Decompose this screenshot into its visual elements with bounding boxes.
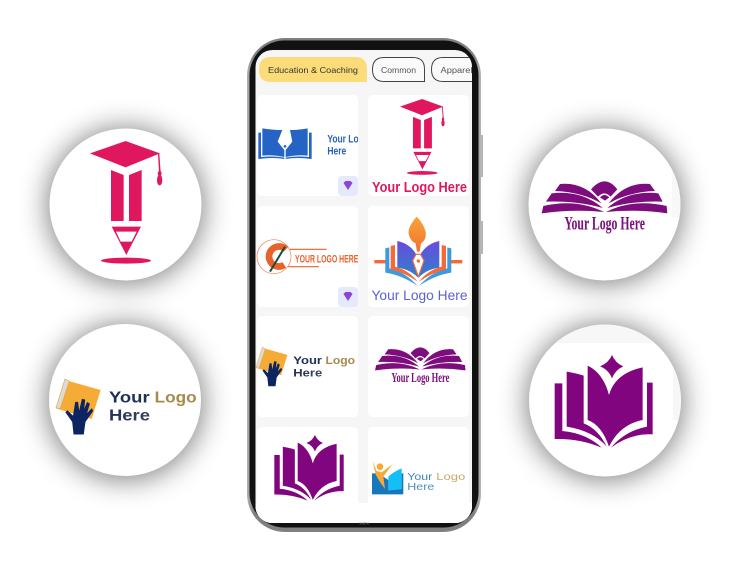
category chip: Common: Common (381, 66, 416, 75)
icon: book and hand (256, 347, 287, 386)
logo text: Your (407, 472, 433, 483)
icon: open book with dome (375, 347, 465, 370)
logo text: Here (407, 482, 435, 493)
card: pink pencil logo (368, 95, 469, 196)
circle: purple book and star logo (525, 320, 685, 480)
icon: graduation pencil (400, 99, 445, 175)
category chip: Apparel: Apparel (440, 66, 473, 75)
logo text: YOUR LOGO HERE (295, 254, 359, 266)
icon: book with nib (258, 128, 312, 159)
logo text: Your (293, 355, 323, 367)
logo text: Your Logo Here (372, 288, 468, 303)
icon: book with star (274, 435, 344, 501)
logo text: Your Logo (327, 134, 369, 146)
circle: open purple book logo (526, 128, 682, 284)
icon: book with star (555, 355, 653, 448)
logo text: Logo (155, 390, 197, 407)
category chip: Education & Coaching: Education & Coaching (268, 65, 358, 75)
brand text: realme (359, 522, 369, 526)
logo text: Here (327, 145, 346, 157)
logo text: Your (109, 390, 150, 407)
logo text: Here (109, 408, 150, 425)
logo text (328, 135, 358, 154)
logo text: Your Logo Here (372, 180, 467, 196)
icon: graduation pencil (90, 141, 162, 264)
card: orange circle logo (257, 206, 359, 307)
circle: graduation pencil logo (48, 128, 204, 284)
logo text: Logo (436, 472, 466, 483)
card: flame book logo (368, 206, 469, 307)
icon: figure and book (372, 461, 403, 494)
icon: flame and book (374, 217, 462, 286)
premium badge (338, 287, 358, 307)
circle: book in hand logo (47, 324, 203, 480)
icon: book and hand (56, 379, 101, 434)
phone body (247, 38, 481, 532)
card: open purple book logo (368, 316, 469, 417)
screen (256, 50, 480, 523)
category chip: Common (372, 58, 424, 82)
card: blue pen book logo (257, 95, 369, 196)
icon: orange C with pen (257, 240, 327, 274)
premium badge (338, 176, 358, 196)
logo text: Here (293, 368, 322, 380)
category chip: Apparel (431, 57, 472, 82)
phone (247, 38, 483, 532)
card: reader and book logo (368, 427, 469, 503)
card: book in hand logo (256, 316, 358, 417)
card: purple book and star logo (257, 427, 358, 517)
logo text: Your Logo Here (391, 370, 449, 385)
category chip: Education & Coaching (259, 57, 367, 82)
icon: open book with dome (542, 181, 667, 213)
logo text: Logo (325, 355, 355, 367)
side buttons (480, 135, 483, 177)
logo text: Your Logo Here (564, 213, 645, 234)
